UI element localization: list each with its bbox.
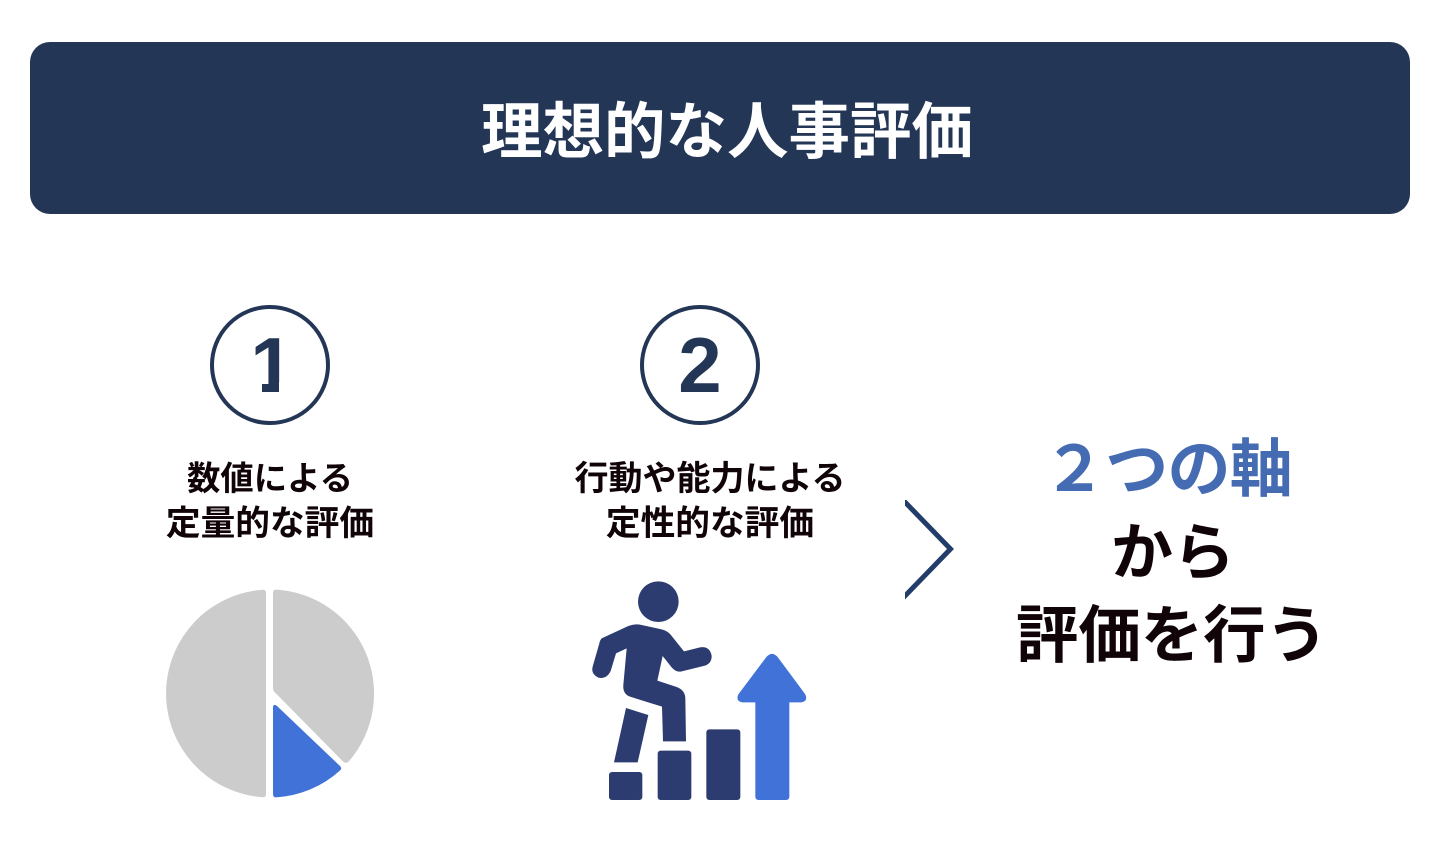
two axes highlight: ２つの軸 [1043, 419, 1292, 510]
number badge 2 [640, 305, 760, 425]
conclusion text [1016, 419, 1328, 675]
icon: climbing steps with arrow [592, 581, 806, 800]
pie chart icon [166, 590, 374, 798]
qualitative label: 行動や能力による [574, 450, 845, 500]
digit 2: 2 [678, 321, 722, 409]
arrow: chevron to conclusion [905, 500, 954, 600]
conclusion line: evaluate: 評価を行う [1016, 585, 1328, 675]
number badge 1 [210, 305, 330, 425]
panel: quantitative evaluation [166, 305, 374, 798]
conclusion line: from: から [1111, 502, 1235, 592]
title banner [30, 42, 1410, 214]
digit 1: 1 [250, 321, 294, 409]
qualitative label: 定性的な評価 [606, 494, 814, 544]
quantitative label: 定量的な評価 [166, 494, 374, 544]
qualitative label [574, 450, 845, 544]
quantitative label: 数値による [187, 450, 353, 500]
title text: 理想的な人事評価 [481, 82, 973, 171]
panel: qualitative evaluation [574, 305, 845, 800]
quantitative label [166, 450, 374, 544]
